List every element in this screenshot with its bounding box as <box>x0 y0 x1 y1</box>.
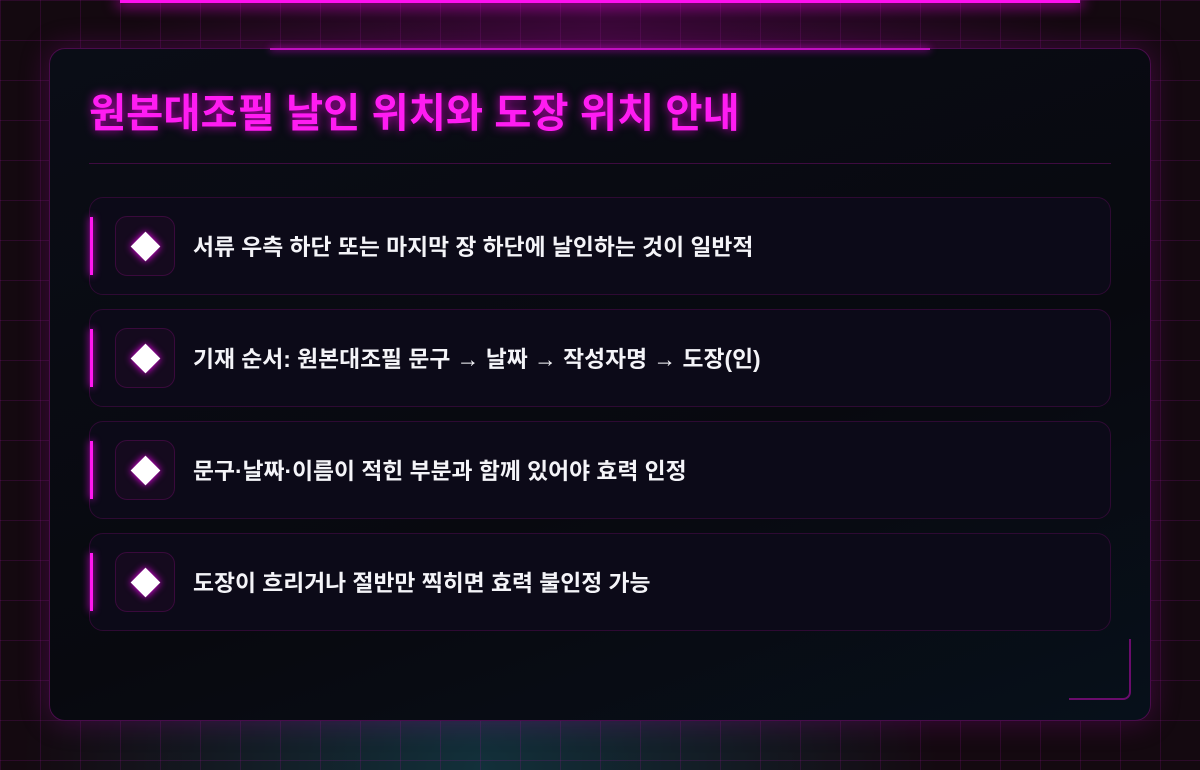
item 4 <box>89 533 1111 631</box>
title: 원본대조필 날인 위치와 도장 위치 안내 <box>89 90 740 136</box>
text 4: 도장이 흐리거나 절반만 찍히면 효력 불인정 가능 <box>193 570 650 596</box>
text 2: 기재 순서: 원본대조필 문구 → 날짜 → 작성자명 → 도장(인) <box>193 346 761 372</box>
text 1: 서류 우측 하단 또는 마지막 장 하단에 날인하는 것이 일반적 <box>193 234 753 260</box>
item 1 <box>89 197 1111 295</box>
icon: diamond <box>115 216 175 276</box>
icon: diamond <box>115 440 175 500</box>
text 3: 문구·날짜·이름이 적힌 부분과 함께 있어야 효력 인정 <box>193 458 687 484</box>
item 3 <box>89 421 1111 519</box>
icon: diamond <box>115 552 175 612</box>
icon: diamond <box>115 328 175 388</box>
item 2 <box>89 309 1111 407</box>
